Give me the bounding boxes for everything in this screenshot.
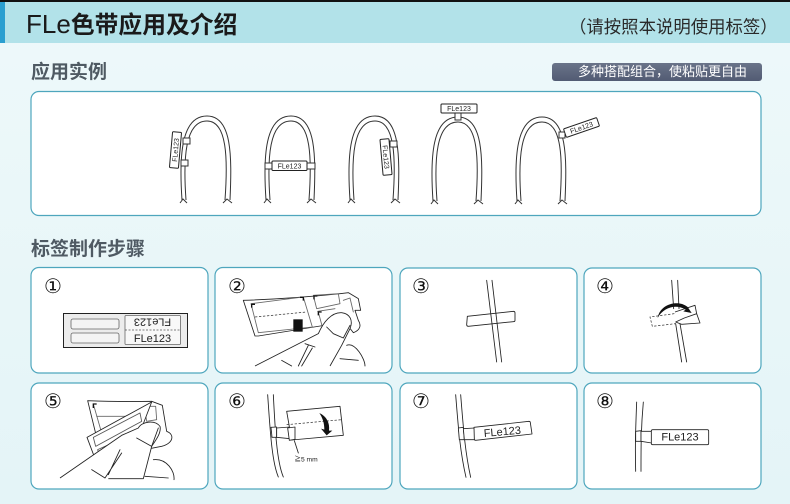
measurement text: ≧5 mm [294,454,318,463]
example 2: label across arch [264,116,316,203]
example 2: label across arch: FLe123 [278,164,301,170]
icon: angled label on wire [456,395,532,477]
step 1 panel [31,268,208,373]
tag pill [552,63,762,81]
heading: application examples: 应用实例 [31,60,107,83]
title: FLe色带应用及介绍 [26,9,237,39]
example 3: label on right side: FLe123 [380,145,390,169]
example 4: label on top [431,104,483,204]
example 1: label along left side: FLe123 [172,138,181,162]
step 5 panel: ⑤ [44,389,62,413]
step 1 panel: ① [44,274,62,298]
step 6 panel [215,383,392,489]
example 5: flag label at upper right: FLe123 [569,121,594,136]
icon: straight label on wire [635,402,709,471]
step 3 panel [400,268,577,373]
example 5: flag label at upper right [515,117,600,204]
icon: fold tape with arrow [650,280,700,362]
tag pill: 多种搭配组合，使粘贴更自由 [578,64,747,79]
step 5 panel [31,383,208,489]
label sheet [64,314,188,348]
step 3 panel: ③ [412,274,430,298]
icon: hand holding tape [243,293,365,366]
icon: angled label on wire: FLe123 [483,425,521,440]
step 4 panel: ④ [596,274,614,298]
icon: straight label on wire: FLe123 [661,432,699,444]
label sheet: FLe123 [134,316,171,328]
step 7 panel [400,383,577,489]
header band [0,2,790,43]
step 7 panel: ⑦ [412,389,430,413]
step 8 panel: ⑧ [596,389,614,413]
example 3: label on right side [348,116,400,203]
step 2 panel: ② [228,274,246,298]
icon: fold over wire with measure [268,395,343,477]
step 4 panel [584,268,761,373]
example 1: label along left side [169,116,232,203]
icon: hand peeling backing [60,401,174,480]
step 6 panel: ⑥ [228,389,246,413]
panel: application examples [31,92,761,216]
label sheet: FLe123 [134,333,171,345]
usage note: （请按照本说明使用标签） [569,17,778,37]
icon: tape wrapped on wire [467,280,515,362]
step 2 panel [215,268,392,373]
step 8 panel [584,383,761,489]
heading: label making steps: 标签制作步骤 [31,238,145,260]
example 4: label on top: FLe123 [447,106,471,113]
